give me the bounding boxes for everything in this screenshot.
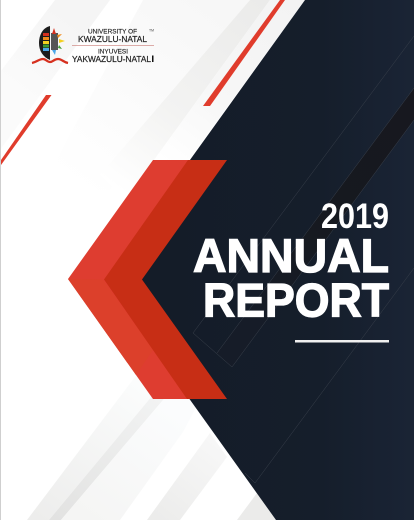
chevron lower arm shade (68, 279, 153, 375)
background: light diagonal stripes (0, 0, 305, 520)
title underline (295, 340, 389, 342)
icon: red wave (32, 59, 68, 63)
trademark: TM (149, 28, 154, 32)
heading line: report: REPORT (203, 274, 389, 326)
logo: university crest and wordmark (32, 26, 154, 64)
wordmark: English: UNIVERSITY OF (88, 28, 137, 36)
logo divider (72, 44, 154, 47)
red accent stripe: left (1, 95, 52, 165)
icon: shield (39, 26, 65, 60)
heading line: annual: ANNUAL (193, 229, 389, 282)
thin line pattern (193, 36, 414, 483)
chevron outer layer (68, 160, 195, 399)
left page edge (0, 0, 1, 520)
dark diagonal band (217, 88, 414, 367)
year: 2019 (321, 197, 389, 236)
logo: university crest and wordmark: YAKWAZULU-NATAL (72, 55, 152, 64)
wordmark: isiZulu: INYUVESI (98, 48, 128, 56)
title text (193, 197, 389, 326)
navy panel (104, 0, 414, 520)
red chevron (68, 160, 227, 399)
logo: university crest and wordmark: KWAZULU-NATAL (78, 35, 148, 44)
red accent stripe: top (203, 0, 285, 106)
chevron inner layer (104, 160, 227, 399)
